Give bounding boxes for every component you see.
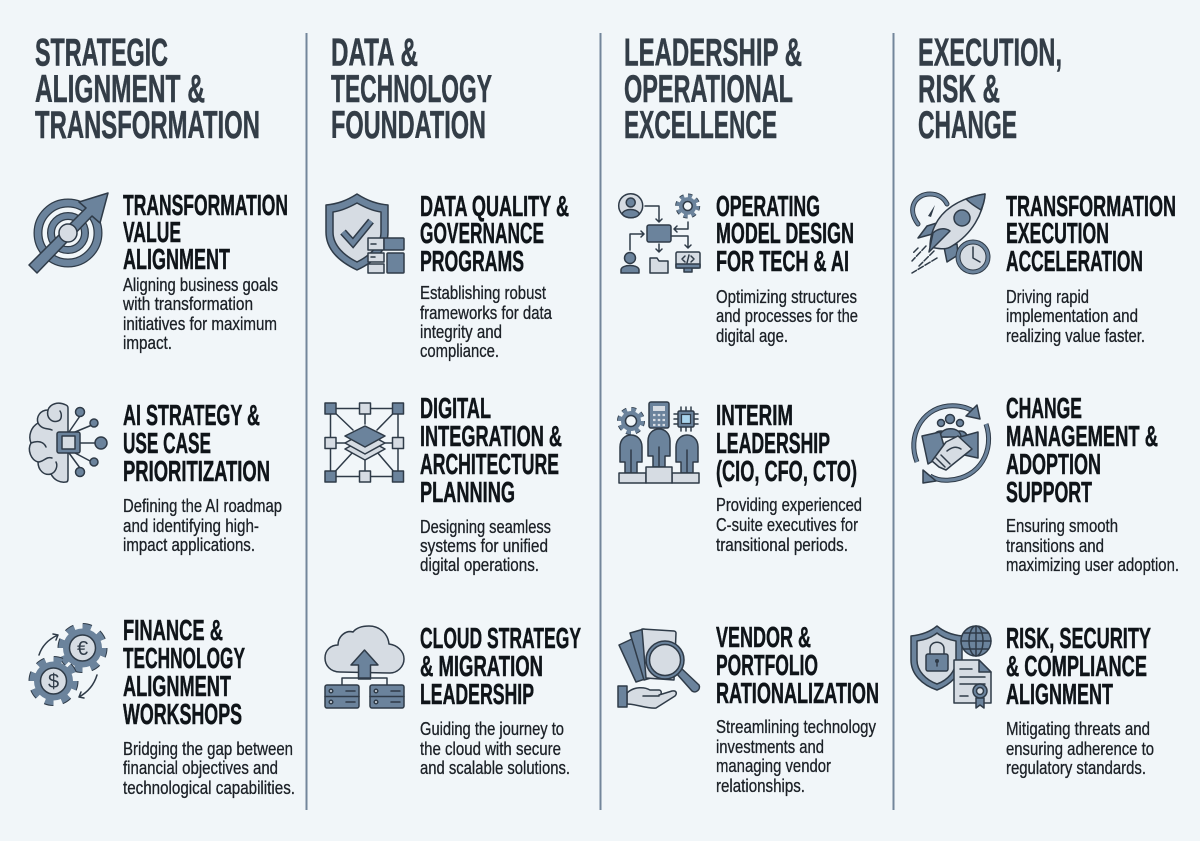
description: [716, 717, 876, 796]
description: [123, 739, 295, 798]
description: financial objectives and: [123, 758, 278, 778]
item: change management: [914, 393, 1179, 575]
description: Guiding the journey to: [420, 719, 564, 739]
description: [1006, 516, 1179, 575]
title: ADOPTION: [1006, 449, 1101, 481]
item: cloud strategy: [325, 623, 581, 778]
title: [123, 615, 245, 731]
description: Ensuring smooth: [1006, 516, 1118, 536]
description: Bridging the gap between: [123, 739, 293, 759]
description: and scalable solutions.: [420, 758, 570, 778]
title: LEADERSHIP: [420, 679, 534, 711]
title: [716, 622, 879, 710]
icon: cloud migration: [325, 626, 404, 708]
title: [1006, 623, 1151, 711]
title: LEADERSHIP: [716, 428, 830, 460]
title: INTEGRATION &: [420, 421, 562, 453]
description: Aligning business goals: [123, 275, 278, 295]
title: VENDOR &: [716, 622, 811, 654]
description: systems for unified: [420, 536, 548, 556]
title: FINANCE &: [123, 615, 223, 647]
title: AI STRATEGY &: [123, 400, 260, 432]
panel: strategic alignment and transformation: [29, 32, 295, 798]
title: [1006, 393, 1158, 509]
panel: leadership and operational excellence: [618, 32, 879, 796]
item: execution acceleration: [912, 191, 1176, 346]
item: data quality: [326, 191, 569, 361]
description: realizing value faster.: [1006, 326, 1145, 346]
title: TRANSFORMATION: [123, 190, 288, 222]
heading: execution, risk and change: [918, 32, 1062, 147]
heading: strategic alignment and transformation: STRATEGIC: [35, 32, 168, 74]
item: interim leadership: [619, 400, 862, 555]
heading: data and technology foundation: DATA &: [331, 32, 418, 74]
heading: strategic alignment and transformation: [35, 32, 260, 147]
icon: shield with check and data grid: [326, 194, 404, 273]
heading: leadership and operational excellence: [624, 32, 802, 147]
title: PROGRAMS: [420, 246, 524, 278]
item: operating model design: [619, 191, 858, 346]
panel: execution, risk and change: [911, 32, 1179, 778]
title: VALUE: [123, 217, 181, 249]
description: with transformation: [122, 294, 253, 314]
description: Optimizing structures: [716, 287, 857, 307]
description: and processes for the: [716, 306, 858, 326]
title: [420, 393, 562, 509]
icon: target with arrow: [29, 193, 108, 273]
description: Establishing robust: [420, 283, 546, 303]
icon: shield, globe and certificate: [911, 626, 991, 708]
description: impact applications.: [123, 535, 255, 555]
description: digital operations.: [420, 555, 539, 575]
icon: rocket with gauge and clock: [912, 194, 988, 273]
title: [123, 400, 270, 488]
description: and identifying high-: [123, 516, 259, 536]
description: compliance.: [420, 341, 499, 361]
item: AI strategy: [29, 400, 282, 555]
icon: currency gears: $: [48, 671, 59, 693]
title: OPERATING: [716, 191, 820, 223]
description: transitions and: [1006, 536, 1104, 556]
item: transformation value alignment: [29, 190, 288, 353]
description: implementation and: [1006, 306, 1138, 326]
description: transitional periods.: [716, 535, 848, 555]
description: integrity and: [420, 322, 502, 342]
heading: data and technology foundation: FOUNDATION: [331, 104, 486, 147]
title: EXECUTION: [1006, 218, 1109, 250]
title: PRIORITIZATION: [123, 456, 270, 488]
title: [1006, 191, 1176, 278]
heading: strategic alignment and transformation: ALIGNMENT &: [35, 68, 205, 111]
description: [716, 495, 862, 555]
description: relationships.: [716, 776, 805, 796]
heading: leadership and operational excellence: LEADERSHIP &: [624, 32, 802, 74]
description: [122, 275, 278, 353]
icon: currency gears: [32, 626, 104, 702]
title: SUPPORT: [1006, 477, 1092, 509]
description: digital age.: [716, 326, 788, 346]
icon: cards, magnifier and hand: [618, 629, 699, 708]
item: digital integration: [325, 393, 562, 575]
title: PORTFOLIO: [716, 650, 818, 682]
description: Designing seamless: [420, 517, 551, 537]
description: Defining the AI roadmap: [123, 496, 282, 516]
icon: architecture network: [325, 403, 404, 482]
description: [420, 517, 551, 575]
title: RATIONALIZATION: [716, 678, 879, 710]
title: & MIGRATION: [420, 651, 543, 683]
description: [123, 496, 282, 555]
heading: leadership and operational excellence: EXCELLENCE: [624, 104, 777, 147]
title: ALIGNMENT: [123, 244, 230, 276]
heading: strategic alignment and transformation: TRANSFORMATION: [35, 104, 260, 147]
description: [420, 719, 570, 778]
title: [716, 400, 857, 488]
description: technological capabilities.: [123, 778, 295, 798]
description: [1006, 719, 1154, 778]
title: ARCHITECTURE: [420, 449, 559, 481]
title: [420, 623, 581, 711]
title: MODEL DESIGN: [716, 218, 854, 250]
heading: leadership and operational excellence: OPERATIONAL: [624, 68, 793, 111]
description: [1006, 287, 1145, 346]
title: TECHNOLOGY: [123, 643, 245, 675]
heading: execution, risk and change: CHANGE: [918, 104, 1017, 147]
description: impact.: [123, 333, 172, 353]
icon: operating model flow: [619, 194, 700, 273]
description: frameworks for data: [420, 303, 553, 323]
title: USE CASE: [123, 428, 211, 460]
title: [716, 191, 854, 278]
title: DATA QUALITY &: [420, 191, 569, 223]
icon: executives on podium: [619, 402, 699, 483]
heading: data and technology foundation: TECHNOLOGY: [331, 68, 492, 111]
title: INTERIM: [716, 400, 793, 432]
title: [123, 190, 288, 276]
item: finance and technology workshops: [32, 615, 295, 798]
description: [420, 283, 553, 361]
title: [420, 191, 569, 278]
description: investments and: [716, 737, 824, 757]
description: Driving rapid: [1006, 287, 1089, 307]
description: managing vendor: [716, 756, 831, 776]
title: WORKSHOPS: [123, 699, 242, 731]
description: Mitigating threats and: [1006, 719, 1150, 739]
title: FOR TECH & AI: [716, 246, 849, 278]
title: CLOUD STRATEGY: [420, 623, 581, 655]
title: DIGITAL: [420, 393, 491, 425]
item: vendor and portfolio: [618, 622, 879, 796]
icon: brain with chip: [29, 403, 107, 482]
title: PLANNING: [420, 477, 515, 509]
description: the cloud with secure: [420, 739, 561, 759]
description: initiatives for maximum: [123, 314, 277, 334]
icon: handshake in cycle arrows: [914, 405, 989, 483]
description: [716, 287, 858, 346]
description: C-suite executives for: [716, 515, 858, 535]
description: Streamlining technology: [716, 717, 876, 737]
title: GOVERNANCE: [420, 218, 544, 250]
item: risk, security and compliance: [911, 623, 1154, 778]
heading: execution, risk and change: RISK &: [918, 68, 1000, 111]
panel: data and technology foundation: [325, 32, 581, 778]
icon: currency gears: €: [77, 638, 88, 660]
description: ensuring adherence to: [1006, 739, 1154, 759]
heading: execution, risk and change: EXECUTION,: [918, 32, 1062, 74]
heading: data and technology foundation: [331, 32, 492, 147]
title: ALIGNMENT: [1006, 679, 1113, 711]
description: regulatory standards.: [1006, 758, 1146, 778]
description: Providing experienced: [716, 495, 862, 515]
title: CHANGE: [1006, 393, 1082, 425]
title: (CIO, CFO, CTO): [716, 456, 857, 488]
title: ALIGNMENT: [123, 671, 231, 703]
